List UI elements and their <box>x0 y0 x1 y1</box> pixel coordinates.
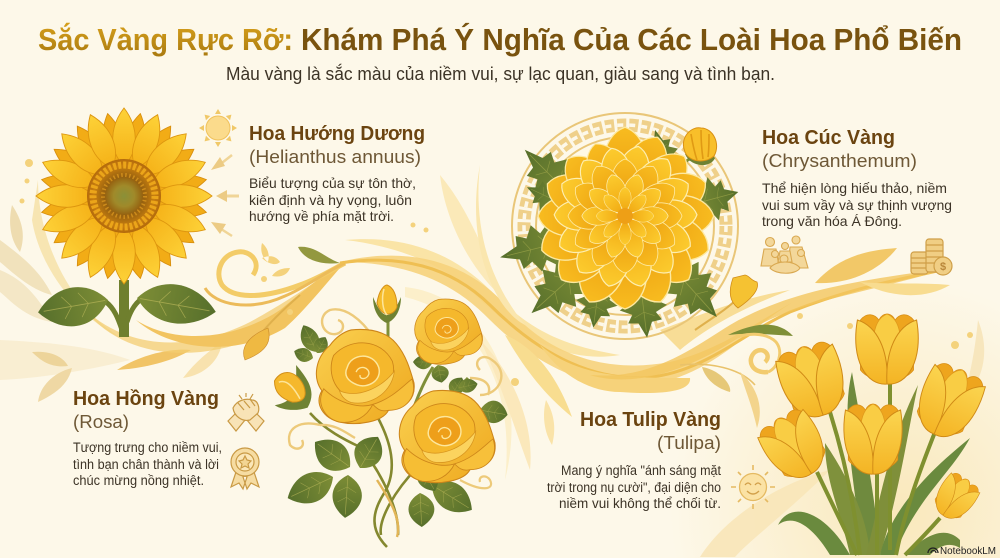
heading: chrysanthemum: Hoa Cúc Vàng <box>762 126 895 149</box>
icon: sun <box>199 109 237 147</box>
text: chrysanthemum: Thể hiện lòng hiếu thảo, niềm <box>762 180 947 196</box>
text: sunflower <box>249 175 416 224</box>
icon: arrows toward the flower <box>211 155 239 236</box>
icon: medal <box>231 448 259 489</box>
title: Khám Phá Ý Nghĩa Của Các Loài Hoa Phổ Biến <box>301 22 962 57</box>
text: tulip: Mang ý nghĩa "ánh sáng mặt <box>561 463 721 478</box>
heading: chrysanthemum <box>762 126 917 171</box>
text: rose: tình bạn chân thành và lời <box>73 457 219 472</box>
text: rose: chúc mừng nồng nhiệt. <box>73 473 204 488</box>
icon: family <box>761 236 808 273</box>
illustration: sunflower <box>35 108 219 337</box>
text: rose <box>73 440 222 488</box>
heading: rose: (Rosa) <box>73 412 129 432</box>
illustration: chrysanthemum <box>494 113 744 340</box>
text: sunflower: kiên định và hy vọng, luôn <box>249 192 412 208</box>
subtitle: Màu vàng là sắc màu của niềm vui, sự lạc quan, giàu sang và tình bạn. <box>226 63 775 84</box>
heading: rose <box>73 387 219 432</box>
text: chrysanthemum: trong văn hóa Á Đông. <box>762 213 902 229</box>
text: chrysanthemum: vui sum vầy và sự thịnh vượng <box>762 197 952 213</box>
title: Sắc Vàng Rực Rỡ: <box>38 21 293 57</box>
text: sunflower: hướng về phía mặt trời. <box>249 208 394 224</box>
heading: sunflower: (Helianthus annuus) <box>249 147 421 167</box>
icon: coins <box>911 239 952 275</box>
text: tulip: niềm vui không thể chối từ. <box>559 496 721 511</box>
illustration: yellow tulips <box>754 314 989 555</box>
text: chrysanthemum <box>762 180 952 229</box>
heading: chrysanthemum: (Chrysanthemum) <box>762 151 917 171</box>
text: tulip <box>547 463 721 511</box>
heading: tulip <box>580 408 721 453</box>
heading: tulip: (Tulipa) <box>657 433 721 453</box>
swirling gold ribbons <box>0 159 984 557</box>
icon: dollar sign: $ <box>940 261 946 273</box>
heading: rose: Hoa Hồng Vàng <box>73 387 219 410</box>
text: tulip: trời trong nụ cười", đại diện cho <box>547 480 721 495</box>
illustration: yellow roses <box>268 285 510 547</box>
heading: sunflower: Hoa Hướng Dương <box>249 122 425 145</box>
text: sunflower: Biểu tượng của sự tôn thờ, <box>249 175 416 191</box>
title <box>38 21 962 57</box>
heading: sunflower <box>249 122 425 167</box>
icon: smiling sun <box>731 465 775 509</box>
watermark: NotebookLM: NotebookLM <box>940 545 996 557</box>
icon: handshake <box>228 393 264 431</box>
text: rose: Tượng trưng cho niềm vui, <box>73 440 222 455</box>
heading: tulip: Hoa Tulip Vàng <box>580 408 721 431</box>
